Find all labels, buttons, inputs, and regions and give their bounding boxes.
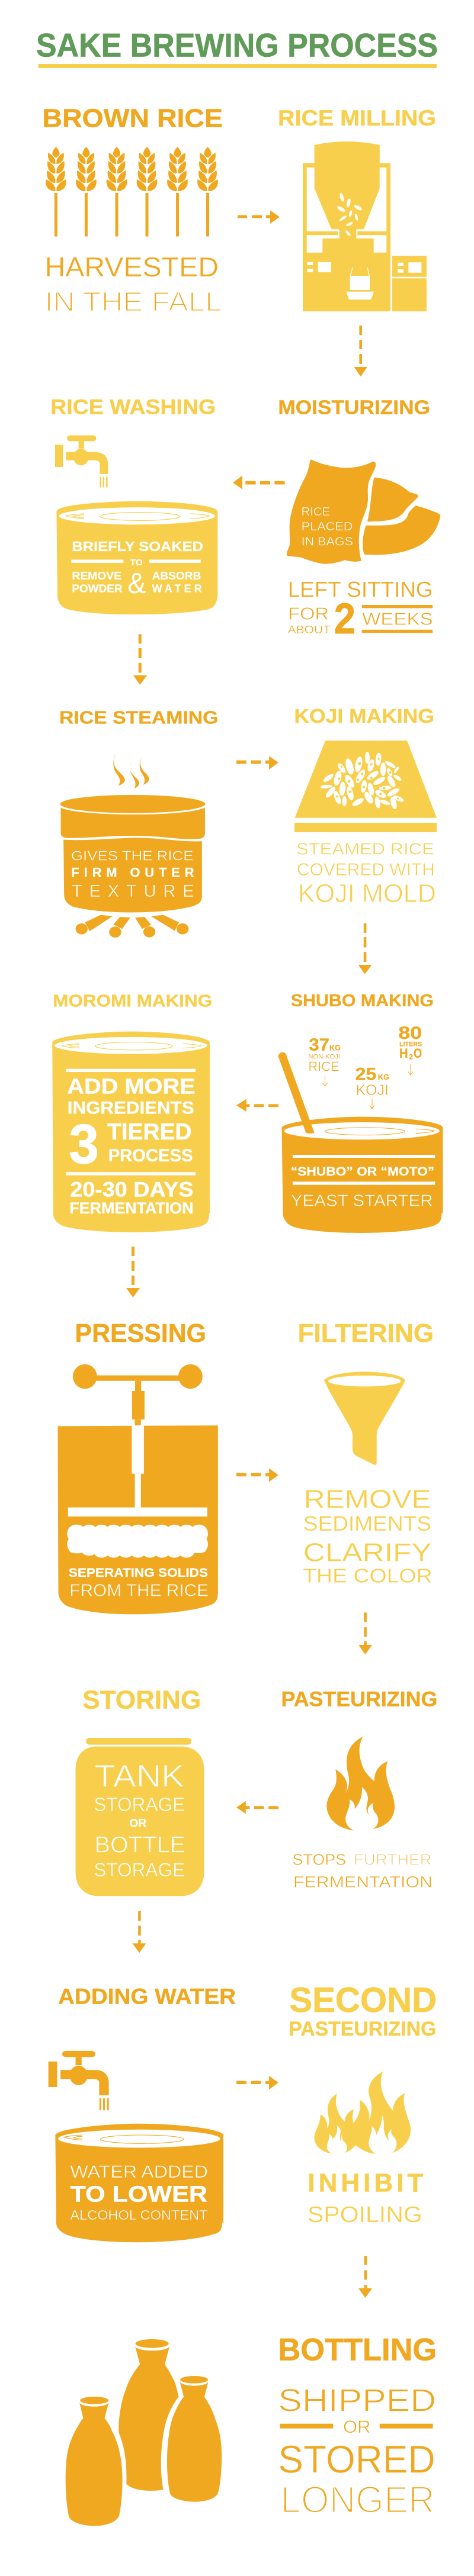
text: 3 tiered process: TIERED [107,1119,192,1145]
text: harvested: HARVESTED [45,252,219,282]
text: add more ingredients: INGREDIENTS [68,1099,194,1118]
label: 80 liters water: O [414,1046,422,1061]
heading: second: SECOND [289,1981,437,2020]
text: for about 2 weeks: WEEKS [362,610,433,629]
text: alcohol content: ALCOHOL CONTENT [70,2207,208,2223]
icon: steaming pot [60,752,205,938]
icon: wheat stalks [46,147,218,237]
text: yeast starter: YEAST STARTER [291,1192,433,1210]
text: in the fall: IN THE FALL [45,286,222,317]
icon: water tap [49,2051,109,2110]
panel: koji making [294,705,437,908]
text: 20-30 days fermentation [69,1178,193,1217]
panel: bottling [66,2332,437,2526]
text: left sitting: LEFT SITTING [288,578,433,602]
icon: washing tub [56,501,217,614]
label: 25 kg koji: KG [378,1073,389,1081]
arrow: pressing to filtering [236,1469,278,1482]
text: clarify the color: THE COLOR [303,1564,433,1586]
text: bottle storage: STORAGE [94,1859,185,1881]
heading: rice steaming: RICE STEAMING [59,707,218,727]
panel: rice washing [50,395,217,614]
heading: moisturizing: MOISTURIZING [278,397,430,418]
label: 37 kg non-koji rice: KG [329,1043,341,1052]
text: rice placed in bags: IN BAGS [302,535,353,548]
text: gives the rice: GIVES THE RICE [71,848,194,863]
icon: storage jar [76,1738,204,1896]
divider with or [280,2417,433,2437]
divider with to: TO [130,558,143,568]
text: bottle storage: BOTTLE [95,1832,185,1857]
text: remove powder: POWDER [72,582,123,594]
panel: storing [76,1686,204,1896]
text: absorb water: ABSORB [152,570,201,582]
text: firm outer: FIRM OUTER [71,865,194,880]
arrow: steaming to koji [236,756,278,769]
heading: brown rice: BROWN RICE [42,104,223,133]
text: 3 tiered process: 3 [69,1113,99,1175]
heading: pasteurizing: PASTEURIZING [281,1688,437,1711]
arrow: second pasteurizing to bottling [358,2256,372,2298]
text: clarify the color: CLARIFY [303,1538,432,1567]
heading: bottling: BOTTLING [278,2332,437,2367]
text: steamed rice: STEAMED RICE [296,839,434,858]
panel: moisturizing [278,397,440,643]
text: stops further fermentation: STOPS [292,1851,346,1869]
text: inhibit: INHIBIT [308,2168,423,2197]
panel: rice milling [278,106,436,311]
text: absorb water: WATER [152,582,202,594]
text: clarify the color [303,1538,433,1586]
panel: shubo making [278,991,443,1233]
heading: pasteurizing: PASTEURIZING [289,2018,436,2040]
text: for about 2 weeks: FOR [288,605,329,624]
text: stops further fermentation [292,1851,433,1891]
heading: moromi making: MOROMI MAKING [53,992,212,1011]
text: remove sediments: REMOVE [304,1485,431,1514]
text: spoiling: SPOILING [308,2203,422,2227]
arrow: shubo to moromi [236,1099,278,1112]
text: add more ingredients [67,1074,196,1118]
icon: funnel [324,1371,405,1465]
text: rice placed in bags: PLACED [302,520,353,533]
title: SAKE BREWING PROCESS [36,26,438,64]
text: remove powder [72,570,123,594]
text: stops further fermentation: FERMENTATION [293,1873,433,1891]
text: covered with: COVERED WITH [297,860,435,880]
icon: shubo tub with paddle [278,1052,443,1233]
text: 3 tiered process: PROCESS [108,1146,193,1165]
label: 80 liters water: LITERS [399,1041,422,1048]
text: remove powder: REMOVE [72,570,121,582]
text: for about 2 weeks: 2 [334,595,356,643]
text: briefly soaked: BRIEFLY SOAKED [72,539,203,554]
divider with to [71,558,201,568]
divider with or: OR [343,2417,371,2437]
arrow: brown rice to milling [238,211,280,224]
text: 20-30 days fermentation: 20-30 DAYS [70,1178,194,1202]
text: water added: WATER ADDED [70,2162,208,2182]
arrow: pasteurizing to storing [236,1801,278,1814]
text: bottle storage [94,1832,185,1881]
label: 80 liters water: H [399,1046,408,1061]
text: seperating solids: SEPERATING SOLIDS [69,1566,208,1580]
arrow: moromi to pressing [126,1247,140,1297]
label: 80 liters water: 2 [409,1052,413,1061]
text: tank storage: TANK [94,1759,184,1793]
panel: moromi making [52,992,212,1232]
panel: second pasteurizing [289,1981,437,2227]
text: texture: TEXTURE [72,882,194,901]
arrow: adding water to second pasteurizing [236,2076,278,2089]
text: or: OR [129,1818,147,1830]
arrow: moisturizing to washing [233,476,285,489]
text: koji mold: KOJI MOLD [298,879,436,908]
arrow: storing to adding water [132,1911,146,1953]
icon: rice bags [287,459,440,564]
icon: water tub [55,2124,223,2242]
panel: filtering [298,1319,434,1586]
heading: filtering: FILTERING [298,1319,434,1348]
text: tank storage [94,1759,185,1815]
icon: sake bottles [66,2339,222,2526]
label: 80 liters water: 80 [398,1023,422,1043]
text: from the rice: FROM THE RICE [69,1581,209,1600]
text: for about 2 weeks: ABOUT [288,624,331,636]
icon: koji tray [294,740,437,832]
label: 37 kg non-koji rice: NON-KOJI [308,1053,340,1060]
text: add more ingredients: ADD MORE [67,1074,196,1098]
icon: press [57,1364,218,1614]
text: 3 tiered process [69,1113,193,1175]
divider bars [293,1155,435,1185]
label: 80 liters water [398,1023,422,1075]
heading: pressing: PRESSING [75,1319,206,1348]
heading: storing: STORING [82,1686,201,1715]
arrow: milling to moisturizing [354,326,367,376]
text: stored: STORED [278,2437,435,2481]
heading: rice washing: RICE WASHING [50,395,216,419]
panel: pasteurizing [281,1688,437,1891]
icon: moromi tank [52,1032,210,1232]
text: for about 2 weeks [288,595,433,643]
text: absorb water [152,570,202,594]
icon: water tap [55,435,108,487]
label: 25 kg koji [356,1064,389,1109]
heading: rice milling: RICE MILLING [278,106,436,130]
label: 37 kg non-koji rice [308,1035,341,1086]
heading: adding water: ADDING WATER [58,1985,236,2009]
heading: shubo making: SHUBO MAKING [291,991,434,1010]
text: 20-30 days fermentation: FERMENTATION [69,1199,193,1217]
heading: koji making: KOJI MAKING [294,705,434,727]
icon: flame [326,1737,395,1831]
text: tank storage: STORAGE [94,1793,185,1815]
text: to lower: TO LOWER [70,2182,207,2207]
text: stops further fermentation: FURTHER [354,1851,432,1869]
icon: milling machine [303,141,427,311]
text: shipped: SHIPPED [278,2382,436,2418]
text: remove sediments: SEDIMENTS [303,1512,431,1535]
text: rice placed in bags [302,505,353,548]
text: ampersand: & [127,568,146,600]
arrow: washing to steaming [133,635,147,685]
label: 37 kg non-koji rice: RICE [308,1058,339,1074]
panel: pressing [57,1319,218,1614]
text: remove sediments [303,1485,431,1535]
icon: flames [315,2071,411,2154]
arrow: koji to shubo [358,923,372,974]
text: shubo or moto: “SHUBO” OR “MOTO” [291,1165,434,1178]
panel: brown rice [42,104,223,317]
text: longer: LONGER [281,2478,435,2521]
text: rice placed in bags: RICE [302,505,330,519]
label: 37 kg non-koji rice: 37 [309,1035,329,1055]
arrow: filtering to pasteurizing [358,1612,372,1654]
panel: rice steaming [59,707,218,938]
label: 25 kg koji: 25 [356,1064,376,1084]
panel: adding water [49,1985,236,2242]
label: 25 kg koji: KOJI [356,1082,389,1099]
